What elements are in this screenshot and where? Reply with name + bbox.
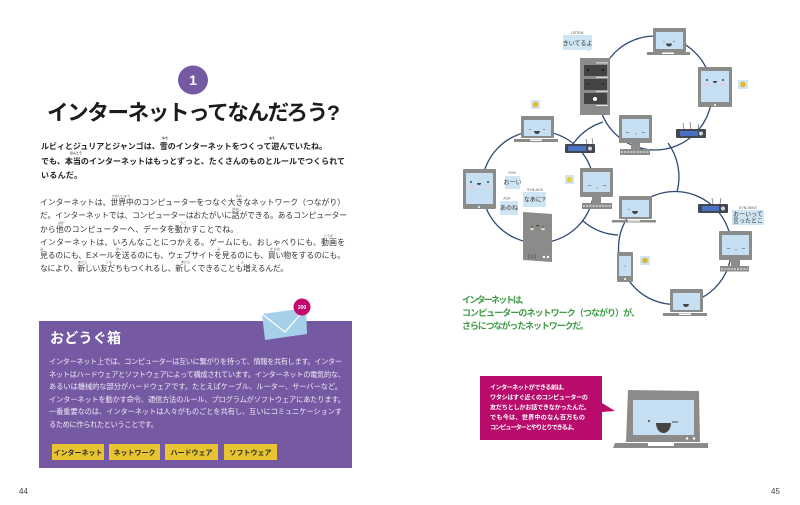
- chapter number badge: 1: [189, 72, 197, 88]
- syn bubbles: おーい: [503, 180, 522, 186]
- green caption: コンピューターのネットワーク（つながり）が、: [462, 307, 640, 318]
- body text: インターネットは、世界中のコンピューターをつなぐ大きなネットワーク（つながり）: [40, 197, 345, 207]
- toolbox heading: おどうぐ箱: [50, 330, 121, 346]
- keyword tags: ネットワーク: [114, 448, 156, 457]
- monitor left: [580, 168, 613, 209]
- body text: [40, 193, 347, 273]
- body text: はなし: [232, 206, 241, 211]
- body text: インターネットは、いろんなことにつかえる。ゲームにも、おしゃべりにも、動画を: [40, 238, 345, 247]
- toolbox text: インターネットを動かす命令、通信方法のルール、プログラムがソフトウェアにあたります。: [49, 395, 345, 404]
- laptop top: [647, 28, 690, 55]
- toolbox text: るために作られたということです。: [49, 420, 158, 429]
- body text: なにより、新しい友だちもつくれるし、新しくできることも増えるんだ。: [40, 263, 288, 273]
- lead paragraph: ゆき: [162, 135, 168, 140]
- router left: [565, 138, 595, 153]
- callout: magenta speech bubble: ワタシはすぐ近くのコンピューターの: [490, 394, 588, 402]
- keyword tags: [52, 444, 277, 460]
- lead paragraph: [41, 135, 345, 180]
- syn bubbles: あのね: [500, 205, 518, 212]
- icon: envelope with badge: 200: [298, 305, 306, 311]
- toolbox text: インターネット上では、コンピューターは互いに繋がりを持って、情報を共有します。インター: [49, 357, 342, 366]
- body text: ほか: [58, 220, 64, 225]
- server tower: [523, 212, 552, 262]
- router right: [676, 122, 706, 138]
- syn bubbles: SYN-ACK: [527, 188, 544, 192]
- page number left: 44: [19, 487, 28, 496]
- syn bubbles: ACK: [503, 196, 511, 200]
- lead paragraph: でも、本当のインターネットはもっとずっと、たくさんのものとルールでつくられて: [41, 156, 345, 166]
- title: インターネットってなんだろう?: [47, 101, 340, 125]
- body text: み: [217, 246, 220, 251]
- body text: 見るのにも、Eメールを送るのにも、ウェブサイトを見るのにも、買い物をするのにも。: [40, 250, 345, 260]
- keyword tags: ソフトウェア: [230, 448, 272, 457]
- syn bubbles: [500, 171, 546, 215]
- body text: あたら: [181, 259, 190, 264]
- callout: magenta speech bubble: インターネットができる前は、: [490, 384, 568, 392]
- large laptop character: [613, 390, 708, 448]
- lead paragraph: いるんだ。: [41, 171, 82, 180]
- listen bubble: LISTEN: [571, 31, 584, 35]
- syn bubbles: SYN: [508, 171, 516, 175]
- syn-sent bubble: おーいって: [733, 212, 763, 218]
- syn-sent bubble: 言ったとこ: [733, 218, 763, 225]
- body text: おく: [116, 246, 122, 251]
- icon: envelope with badge: [262, 298, 310, 340]
- chapter number badge: [178, 66, 208, 94]
- callout: magenta speech bubble: でも今は、世界中のなん百万もの: [490, 414, 585, 422]
- listen bubble: きいてるよ: [563, 40, 592, 48]
- syn-sent bubble: SYN-SENT: [739, 206, 758, 210]
- green caption: さらにつながったネットワークだ。: [462, 320, 589, 331]
- emoji icons: [531, 80, 748, 265]
- lead paragraph: ほんとう: [70, 150, 82, 155]
- callout: magenta speech bubble: コンピューターとやりとりできるよ。: [490, 424, 578, 432]
- body text: ふ: [241, 259, 244, 264]
- panel: toolbox: [39, 321, 352, 468]
- listen bubble: [563, 31, 592, 52]
- body text: あたら: [78, 259, 87, 264]
- toolbox text: あるいは機械的な部分がハードウェアです。たとえばケーブル、ルーター、サーバーなど。: [49, 382, 342, 391]
- tablet left: [463, 169, 496, 209]
- laptop bottom: [663, 289, 707, 316]
- monitor middle: [619, 115, 652, 155]
- body text: どうが: [324, 233, 333, 238]
- green caption: [462, 294, 640, 331]
- toolbox text: 一番重要なのは、インターネットは人々がものごとを共有し、互いにコミュニケーションす: [49, 407, 342, 416]
- callout: magenta speech bubble: 友だちとしかお話できなかったんだ。: [490, 404, 590, 412]
- callout: magenta speech bubble: [480, 376, 615, 440]
- laptop upper left: [514, 116, 558, 142]
- lead paragraph: ルビィとジュリアとジャンゴは、雪のインターネットをつくって遊んでいたね。: [41, 141, 327, 151]
- toolbox text: [49, 357, 345, 429]
- network rings: [482, 36, 732, 304]
- smartphone: [617, 252, 633, 282]
- lead paragraph: あそ: [269, 135, 275, 140]
- keyword tags: ハードウェア: [170, 448, 212, 457]
- syn-sent bubble: [732, 206, 764, 225]
- body text: だ。インターネットでは、コンピューターはおたがいに話ができる。あるコンピューター: [40, 210, 347, 220]
- body text: か もの: [270, 246, 280, 251]
- body text: から他のコンピューターへ、データを動かすことでね。: [40, 224, 238, 234]
- body text: とも: [106, 259, 112, 264]
- page number right: 45: [771, 487, 780, 496]
- body text: おお: [236, 193, 242, 198]
- server rack: [580, 58, 610, 115]
- monitor right: [719, 231, 752, 272]
- body text: み: [40, 246, 43, 251]
- body text: うご: [180, 220, 186, 225]
- syn bubbles: なあに?: [524, 196, 546, 204]
- green caption: インターネットは、: [462, 294, 529, 305]
- laptop centre: [612, 196, 656, 222]
- router lower right: [698, 198, 728, 213]
- toolbox text: ネットはハードウェアとソフトウェアによって構成されています。インターネットの電気的な、: [49, 370, 345, 379]
- tablet top right: [698, 67, 732, 107]
- keyword tags: インターネット: [54, 448, 102, 457]
- body text: せかいじゅう: [112, 193, 130, 198]
